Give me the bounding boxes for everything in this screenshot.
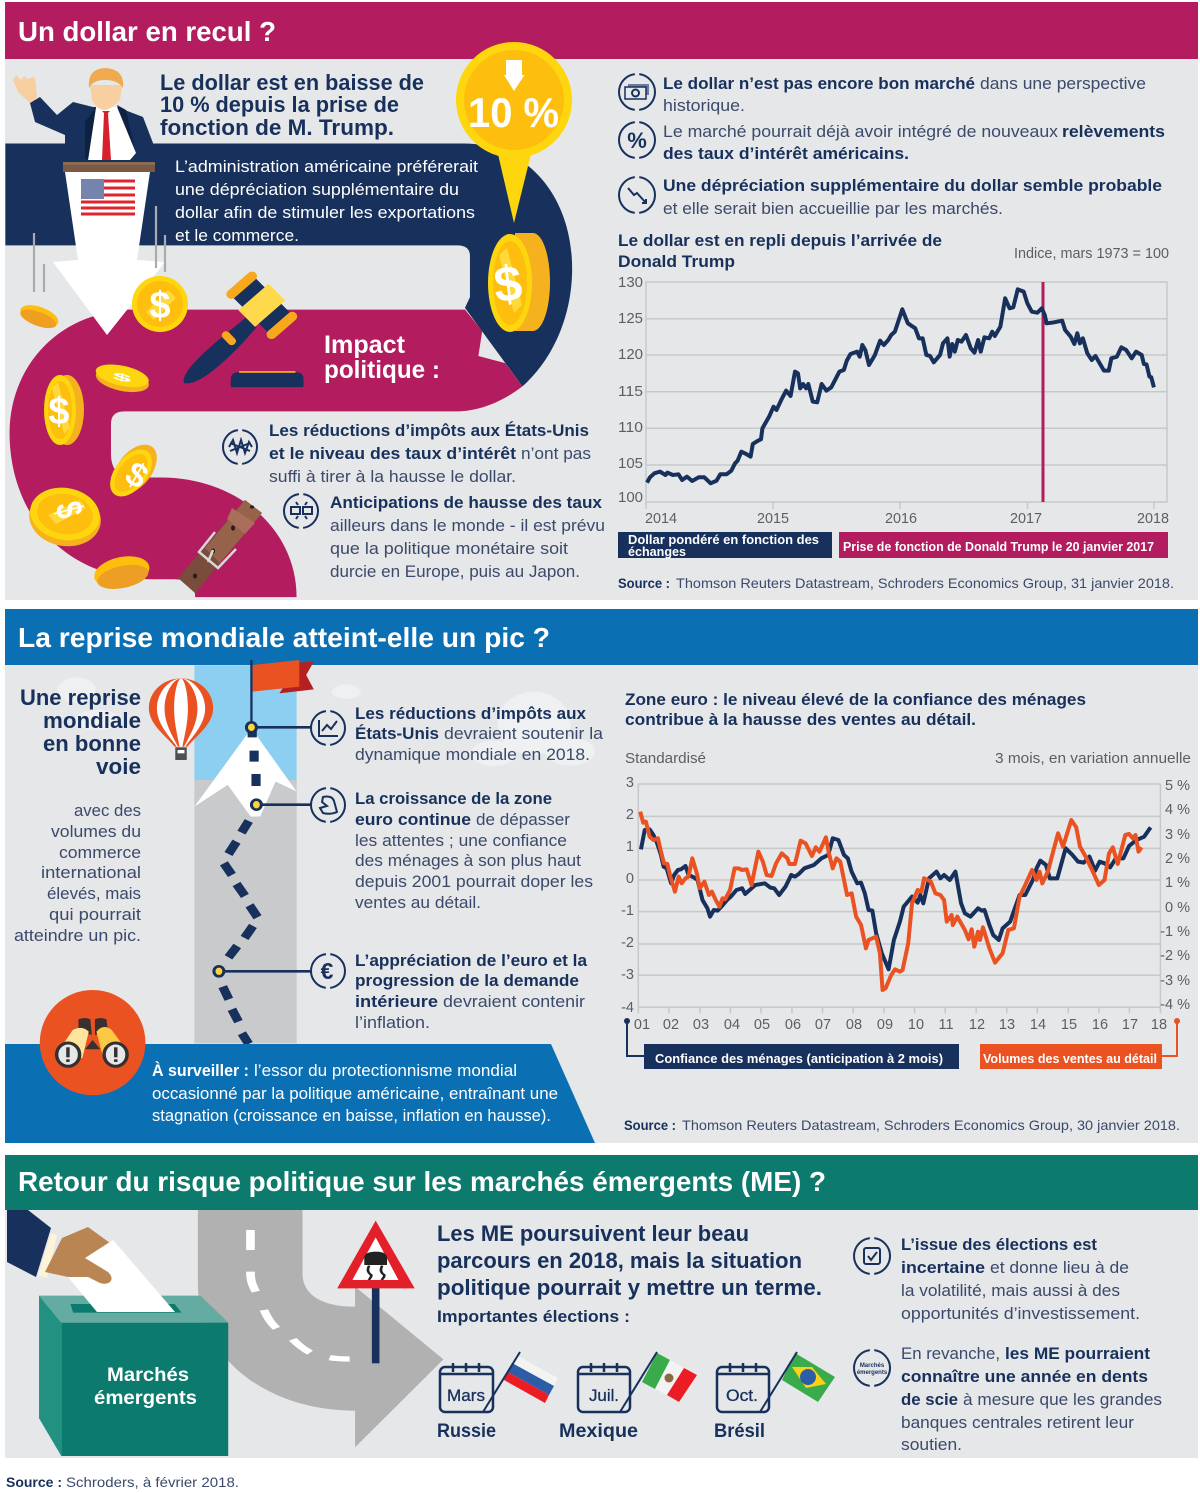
text block: année en dents de scie: En revanche, [901,1345,1000,1363]
chart title: Le dollar est en repli depuis l’arrivée de [618,232,942,250]
illustration: road and ballot box [39,1210,443,1456]
legend: dollar pondéré: échanges [628,545,686,559]
tilted coin: $ [119,454,154,497]
text block: appréciation de l'euro: devraient contenir [443,993,586,1011]
chart title [618,232,942,271]
text block: réductions d'impôts aux États-Unis [355,705,604,764]
right axis labels [1160,778,1190,1013]
text block: relèvements des taux: des taux d’intérêt américains. [663,145,909,163]
heading: les ME poursuivent [437,1221,822,1300]
text block: issue des élections: et donne lieu à de [990,1259,1129,1277]
clouds [57,677,595,766]
tilted coin [102,436,166,504]
text block: appréciation de l'euro: progression de la demande [355,972,579,990]
flag: Mexique [620,1352,697,1412]
axis units: 3 mois, en variation annuelle [995,751,1191,767]
callout: à surveiller: À surveiller : [152,1061,249,1080]
icon: hausse des taux [284,494,318,528]
text block: croissance de la zone euro [355,790,593,912]
left axis labels: -2 [621,935,634,951]
icon: euro: € [321,958,334,984]
heading: dollar en baisse [160,70,424,140]
x axis labels: 02 [663,1017,679,1033]
text block: relèvements des taux [663,123,1165,163]
text block: volumes du commerce: qui pourrait [49,906,141,924]
text block: volumes du commerce: élevés, mais [47,885,141,903]
text block: année en dents de scie: les ME pourraient [1005,1345,1151,1363]
text block: volumes du commerce: volumes du [51,823,141,841]
road with arrow [198,1210,443,1447]
text block: administration américaine: et le commerce. [175,227,299,245]
side coin: $ [48,391,70,433]
callout: à surveiller [5,990,595,1143]
right axis labels: 3 % [1165,827,1190,843]
chart: dollar pondéré 2014-2018 [618,232,1174,591]
icon: 10 % gold pin [456,42,572,223]
legend: prise de fonction: Prise de fonction de Donald Trump le 20 janvier 2017 [843,540,1154,554]
text block: dépréciation supplémentaire [663,177,1162,218]
source: Thomson Reuters Datastream, Schroders Economics Group, 30 janvier 2018. [682,1117,1180,1133]
x axis labels: 05 [754,1017,770,1033]
icon: graphique [311,711,345,745]
text block: volumes du commerce: avec des [74,802,141,820]
icon: binoculars [40,990,145,1095]
x axis labels: 06 [785,1017,801,1033]
left axis labels: -4 [621,1000,634,1016]
text block: réductions d'impôts aux États-Unis: États-Unis [355,724,439,743]
heading: les ME poursuivent: parcours en 2018, mais la situation [437,1248,802,1273]
icon: marchés émergents: émergents [857,1370,888,1376]
x axis labels: 2017 [1010,511,1042,527]
election labels: Oct. [726,1386,758,1405]
callout: à surveiller: occasionné par la politique américaine, entraînant une [152,1085,558,1103]
icon: pourcentage: % [627,128,647,153]
left axis labels: -1 [621,903,634,919]
right axis labels: -1 % [1160,924,1190,940]
left axis labels: 3 [626,775,634,791]
election labels: Juil. [589,1386,619,1405]
text block: anticipations [330,494,605,581]
label: marchés émergents: Marchés [107,1365,189,1386]
text block: administration américaine: dollar afin de stimuler les exportations [175,204,475,222]
y axis labels: 115 [618,384,643,400]
text block: issue des élections: la volatilité, mais aussi à des [901,1282,1120,1300]
text block: réductions d'impôts: n’ont pas [521,445,591,463]
icon: marchés émergents: Marchés [860,1363,885,1369]
heading: une reprise mondiale en bonne voie [20,685,141,779]
right axis labels: -2 % [1160,948,1190,964]
text block: volumes du commerce: commerce [59,844,141,862]
chart title: Donald Trump [618,253,735,271]
text block: année en dents de scie: banques centrales retirent leur [901,1414,1135,1432]
flag: Russie [483,1352,558,1412]
axis unit: Indice, mars 1973 = 100 [1014,246,1169,262]
marker: prise de fonction [1042,282,1044,502]
flag on summit [250,660,314,727]
flag: Brésil [760,1352,835,1412]
icon: tendance baissière [619,177,655,213]
connector lines [219,727,312,971]
callout: à surveiller: l’essor du protectionnisme mondial [254,1062,517,1080]
icon: billet [619,74,655,110]
icon: pourcentage [619,122,655,158]
dashed path [223,729,258,1044]
text block: pas encore bon marché [663,75,1146,115]
election labels: Mexique [559,1421,638,1442]
axis units: Standardisé [625,751,706,767]
heading: une reprise mondiale en bonne voie: voie [96,754,141,779]
line: confiance des ménages [641,827,1151,969]
text block: pas encore bon marché: Le dollar n’est pas encore bon marché [663,75,975,93]
right axis labels: 1 % [1165,875,1190,891]
header band: un dollar en recul: Un dollar en recul ? [18,16,276,47]
heading: une reprise mondiale en bonne voie: Une reprise [20,685,141,710]
text block: volumes du commerce [14,802,141,945]
legend: volumes des ventes [980,1018,1180,1069]
y axis labels: 120 [618,347,643,363]
calendar: Mexique [578,1363,630,1412]
icon: slippery road sign [337,1221,415,1363]
x axis labels: 2015 [757,511,789,527]
text block: année en dents de scie: soutien. [901,1436,962,1454]
text block: relèvements des taux: relèvements [1062,123,1165,141]
text block: croissance de la zone euro: euro continue [355,811,471,829]
chart title: contribue à la hausse des ventes au détail. [625,711,976,729]
text block: dépréciation supplémentaire: Une dépréciation supplémentaire du dollar semble probable [663,177,1162,195]
large coin: $ [47,497,92,522]
coin face on: $ [149,285,171,327]
icon: carte de la zone euro [311,788,345,822]
source: Source : [6,1474,62,1490]
text block: issue des élections: incertaine [901,1259,985,1277]
icon: Trump at podium [13,68,165,335]
label: marchés émergents: émergents [94,1388,197,1409]
text block: appréciation de l'euro [355,952,588,1032]
chart title: Zone euro : le niveau élevé de la confiance des ménages [625,691,1086,709]
header band: la reprise mondiale [5,609,1198,665]
x axis labels: 11 [938,1017,954,1033]
heading: impact politique: politique : [324,356,440,384]
source [6,1474,239,1490]
x axis labels [645,511,1169,527]
y axis labels: 105 [618,456,643,472]
x axis labels: 12 [969,1017,985,1033]
text block: réductions d'impôts: suffi à tirer à la hausse le dollar. [269,468,516,486]
icon: ballot box [39,1296,228,1456]
right axis labels: -3 % [1160,973,1190,989]
header band: la reprise mondiale: La reprise mondiale atteint-elle un pic ? [18,622,550,653]
icon: belt with buckle [178,500,262,593]
illustration: mountain, balloon and path [57,660,595,1044]
x axis labels [634,1017,1167,1033]
icon: case à cocher [854,1238,890,1274]
chart: confiance des ménages et ventes au détail [621,691,1191,1133]
header band: retour du risque politique [5,1155,1198,1210]
text block: anticipations: que la politique monétaire soit [330,540,568,558]
heading: une reprise mondiale en bonne voie: mondiale [43,708,141,733]
text block: année en dents de scie: à mesure que les grandes [963,1391,1162,1409]
heading: les ME poursuivent: politique pourrait y mettre un terme. [437,1275,822,1300]
text block: réductions d'impôts: et le niveau des taux d’intérêt [269,445,517,463]
left axis labels: -3 [621,967,634,983]
left axis labels [621,775,634,1016]
text block: année en dents de scie: de scie [901,1391,958,1409]
legend: volumes des ventes: Volumes des ventes au détail [983,1052,1157,1066]
icon: falling dollar coins [17,233,550,593]
heading: une reprise mondiale en bonne voie: en bonne [43,731,141,756]
heading: impact politique: Impact [324,331,406,359]
text block: réductions d'impôts aux États-Unis: dynamique mondiale en 2018. [355,746,590,764]
y axis labels: 130 [618,275,643,291]
right axis labels: 0 % [1165,900,1190,916]
text block: réductions d'impôts aux États-Unis: devraient soutenir la [444,725,604,743]
x axis labels: 2016 [885,511,917,527]
legend: dollar pondéré: Dollar pondéré en fonction des [628,533,819,547]
text block: réductions d'impôts [269,421,591,486]
x axis labels: 16 [1092,1017,1108,1033]
coin on right road [488,233,550,332]
axis units [625,751,1191,767]
legend: confiance des ménages: Confiance des ménages (anticipation à 2 mois) [655,1052,943,1066]
icon: euro [311,954,345,988]
text block: année en dents de scie: connaître une année en dents [901,1368,1148,1386]
flat coin with dollar [93,360,152,396]
text block: appréciation de l'euro: intérieure [355,993,438,1011]
left axis labels: 1 [626,839,634,855]
flat coin with dollar: $ [111,370,132,385]
header band: retour du risque politique: Retour du risque politique sur les marchés émergents (ME) ? [18,1166,826,1197]
text block: appréciation de l'euro: L’appréciation de l’euro et la [355,952,588,970]
x axis labels: 04 [724,1017,740,1033]
election labels [437,1386,765,1442]
y axis labels: 125 [618,311,643,327]
side coin [44,375,84,445]
heading: dollar en baisse: fonction de M. Trump. [160,115,394,140]
hot-air balloon [149,678,213,760]
x axis labels: 18 [1151,1017,1167,1033]
left axis labels: 0 [626,871,634,887]
left axis labels: 2 [626,807,634,823]
icon: voting hand and ballot [7,1210,175,1312]
text block: anticipations: Anticipations de hausse des taux [330,494,603,512]
legend: dollar pondéré [618,532,832,559]
text block: volumes du commerce: atteindre un pic. [14,927,141,945]
heading: impact politique [324,331,440,384]
text block: relèvements des taux: Le marché pourrait déjà avoir intégré de nouveaux [663,123,1059,141]
large coin [25,482,105,552]
text block: administration américaine [175,158,478,245]
icon: calendars and flags [440,1352,835,1412]
source: Source : [624,1117,676,1133]
right axis labels: 4 % [1165,802,1190,818]
text block: croissance de la zone euro: les attentes ; une confiance [355,832,567,850]
text block: croissance de la zone euro: La croissance de la zone [355,790,552,808]
text block: issue des élections: L’issue des élections est [901,1236,1098,1254]
coin face on [132,276,188,332]
x axis labels: 15 [1061,1017,1077,1033]
text block: administration américaine: une dépréciation supplémentaire du [175,181,459,199]
line: volumes des ventes [640,812,1142,990]
x axis labels: 14 [1030,1017,1046,1033]
right axis labels: 2 % [1165,851,1190,867]
calendar: Brésil [717,1363,769,1412]
icon: marchés émergents [854,1350,890,1386]
legend: prise de fonction [839,532,1168,558]
icon: waves [223,430,257,464]
icon: gavel [184,269,303,387]
x axis labels: 03 [693,1017,709,1033]
source: Source : [618,575,670,591]
flat bottom coin [91,552,153,593]
text block: réductions d'impôts: Les réductions d’impôts aux États-Unis [269,421,589,440]
text block: croissance de la zone euro: des ménages à son plus haut [355,852,581,870]
text block: dépréciation supplémentaire: et elle serait bien accueillie par les marchés. [663,200,1003,218]
value: 10 %: 10 % [468,89,559,136]
chart title [625,691,1086,729]
calendar: Russie [440,1363,493,1412]
y axis labels [618,275,643,506]
text block: pas encore bon marché: dans une perspective [980,75,1146,93]
x axis labels: 08 [846,1017,862,1033]
election labels: Mars [447,1386,485,1405]
panel: la reprise mondiale [5,609,1198,1143]
x axis labels: 01 [634,1017,650,1033]
label: marchés émergents [94,1365,197,1409]
source: Schroders, à février 2018. [66,1474,239,1490]
x axis labels: 2014 [645,511,677,527]
icon: US flag [81,179,135,214]
text block: anticipations: ailleurs dans le monde - il est prévu [330,517,605,535]
x axis labels: 09 [877,1017,893,1033]
election labels: Russie [437,1421,496,1442]
text block: croissance de la zone euro: depuis 2001 pourrait doper les [355,873,593,891]
legend: confiance des ménages [624,1018,959,1069]
text block: croissance de la zone euro: de dépasser [476,811,571,829]
panel: retour du risque politique [5,1155,1198,1458]
right axis labels: -4 % [1160,997,1190,1013]
text block: année en dents de scie [901,1345,1162,1454]
x axis labels: 13 [999,1017,1015,1033]
line: dollar [647,289,1154,483]
panel: un dollar en recul [5,2,1198,600]
text block: appréciation de l'euro: l’inflation. [355,1014,430,1032]
election labels: Brésil [714,1421,765,1442]
text block: anticipations: durcie en Europe, puis au Japon. [330,563,580,581]
x axis labels: 10 [908,1017,924,1033]
source: Thomson Reuters Datastream, Schroders Economics Group, 31 janvier 2018. [676,575,1174,591]
text block: croissance de la zone euro: ventes au détail. [355,894,481,912]
x axis labels: 2018 [1137,511,1169,527]
header band: un dollar en recul [5,2,1198,59]
heading: dollar en baisse: Le dollar est en baisse de [160,70,424,95]
text block: issue des élections: opportunités d’investissement. [901,1305,1140,1323]
heading: les ME poursuivent: Les ME poursuivent leur beau [437,1221,749,1246]
text block: administration américaine: L’administration américaine préférerait [175,158,478,176]
callout: à surveiller: stagnation (croissance en baisse, inflation en hausse). [152,1107,551,1125]
right axis labels: 5 % [1165,778,1190,794]
milestone dots [214,722,261,976]
text block: volumes du commerce: international [41,864,141,882]
text block: issue des élections [901,1236,1140,1323]
x axis labels: 07 [815,1017,831,1033]
icon: speed lines [34,206,165,292]
subheading: importantes élections: Importantes élections : [437,1308,630,1326]
y axis labels: 110 [618,420,643,436]
illustration: S-shaped road with gavel [5,144,572,597]
text block: réductions d'impôts aux États-Unis: Les réductions d’impôts aux [355,705,587,723]
coin on right road: $ [491,255,525,313]
flat coin [17,301,61,332]
y axis labels: 100 [618,490,643,506]
text block: pas encore bon marché: historique. [663,97,745,115]
heading: dollar en baisse: 10 % depuis la prise de [160,92,399,117]
x axis labels: 17 [1122,1017,1138,1033]
